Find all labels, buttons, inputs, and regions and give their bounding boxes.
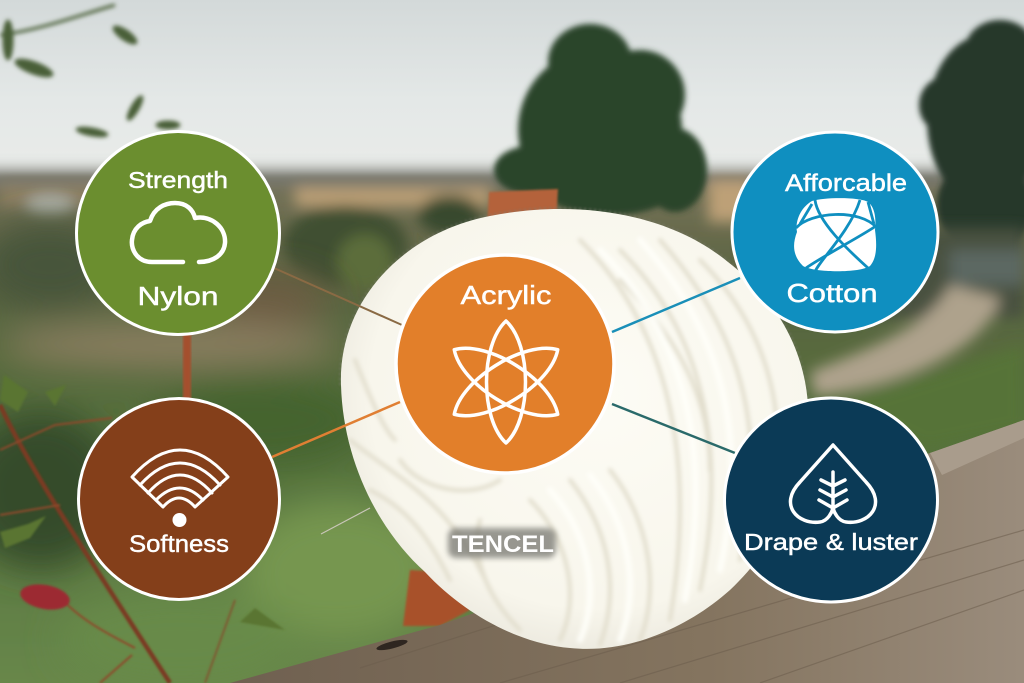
background branches top left — [0, 5, 180, 139]
panel: Acrylic center — [396, 255, 614, 473]
panel: Cotton affordable: Cotton — [786, 278, 878, 308]
panel: Drape and luster — [724, 398, 938, 602]
label: TENCEL: TENCEL — [452, 531, 554, 558]
icon: cloud — [132, 203, 225, 262]
background photo: right field and road — [745, 228, 1024, 450]
panel: Cotton affordable — [732, 132, 938, 332]
icon: yarn ball — [794, 198, 877, 272]
yarn ball — [341, 209, 808, 649]
icon: leaf heart — [790, 445, 876, 522]
wooden post behind yarn — [403, 189, 558, 626]
background photo: land — [0, 170, 1024, 683]
yarn fuzz halo — [341, 209, 808, 430]
panel: Nylon strength: Strength — [128, 167, 228, 193]
panel: Softness: Softness — [129, 531, 229, 558]
panel: Acrylic center: Acrylic — [460, 280, 552, 310]
panel: Nylon strength: Nylon — [138, 281, 218, 311]
icon: wifi — [132, 450, 228, 507]
panel: Cotton affordable: Afforcable — [785, 170, 907, 197]
icon: atom — [444, 321, 568, 443]
background photo: large tree — [494, 24, 707, 215]
connector lines — [272, 268, 740, 534]
panel: Softness — [78, 398, 280, 600]
background photo: right tree — [919, 20, 1024, 253]
wooden deck rail — [230, 420, 1024, 683]
background photo: sky — [0, 0, 1024, 200]
panel: Drape and luster: Drape & luster — [744, 529, 918, 555]
panel: Nylon strength — [76, 132, 280, 334]
background post behind circles — [183, 330, 191, 400]
foreground plant left — [0, 375, 285, 683]
